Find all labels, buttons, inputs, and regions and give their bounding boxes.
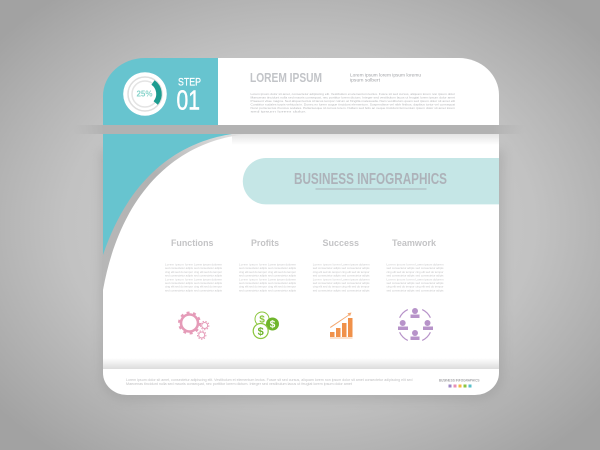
lorem text: sed consectetur adipis	[165, 266, 194, 270]
header paragraph: Curabitur sodales turpis vehicula in. Donec ex lorem augue tincidunt elementum. Suspendisse vel nibh finibus, dapibus tortor vel consequat	[250, 102, 455, 106]
lorem text: cing elit sed do tempor	[313, 270, 341, 274]
title pill	[243, 158, 499, 204]
lorem text: sed consectetur adipis	[268, 281, 297, 285]
lorem text: sed consectetur adipis	[194, 266, 223, 270]
lorem text	[313, 262, 370, 292]
lorem text: sed consectetur adipis	[239, 266, 268, 270]
icon: coins	[253, 312, 279, 338]
progress ring icon	[123, 72, 167, 116]
header subtitle: Lorem ipsum lorem ipsum loremu	[350, 72, 422, 78]
lorem text: sed consectetur adipis	[268, 288, 297, 292]
teal corner shape	[103, 134, 232, 255]
lorem text: cing elit sed do tempor	[416, 270, 444, 274]
lorem text: sed consectetur adipis	[416, 281, 444, 285]
step label: STEP	[178, 77, 201, 89]
lorem text: sed consectetur adipis	[313, 274, 341, 278]
lorem text: Lorem ipsum lorem	[313, 262, 341, 266]
lorem text: cing elit sed do tempor	[268, 270, 296, 274]
lorem text: cing elit sed do tempor	[386, 285, 415, 289]
header paragraph: Lorem ipsum dolor sit amet, consectetur adipiscing elit. Vestibulum et elementum lectus. Fusce sit sed cursus, aliquam lorem non ipsum dolor	[250, 92, 455, 96]
lorem text: cing elit sed do tempor	[194, 285, 222, 289]
lorem text	[386, 262, 444, 292]
heading: Functions	[171, 238, 214, 249]
lorem text: sed consectetur adipis	[342, 288, 370, 292]
lorem text: cing elit sed do tempor	[165, 270, 193, 274]
lorem text: cing elit sed do tempor	[239, 285, 267, 289]
lorem text: cing elit sed do tempor	[194, 270, 222, 274]
top fold shading	[232, 134, 499, 145]
icon: coins: $	[270, 320, 276, 330]
icon: gears	[179, 312, 209, 339]
lorem text: cing elit sed do tempor	[416, 285, 444, 289]
lorem text: sed consectetur adipis	[313, 288, 341, 292]
column: teamwork	[386, 238, 444, 340]
column: profits	[239, 238, 297, 338]
footer colour dots	[448, 384, 472, 388]
header teal panel	[103, 58, 218, 125]
column: success	[313, 238, 370, 338]
grey swoosh	[103, 134, 249, 290]
lorem text: sed consectetur adipis	[268, 274, 297, 278]
lorem text: sed consectetur adipis	[239, 288, 268, 292]
heading: Profits	[251, 238, 279, 249]
lorem text: sed consectetur adipis	[386, 274, 415, 278]
footer text: Lorem ipsum dolor sit amet, consectetur adipiscing elit. Vestibulum et elementum lectus. Fusce sit sed cursus, aliquam lorem non ipsum dolor sit amet consectetur adipiscing elit sed	[126, 378, 413, 382]
heading: Teamwork	[392, 238, 437, 249]
panel: main content	[103, 134, 499, 369]
header white panel	[218, 58, 499, 125]
footer white panel	[103, 369, 499, 395]
lorem text: Lorem ipsum dolorem	[342, 262, 370, 266]
lorem text	[165, 262, 223, 292]
lorem text: Lorem ipsum dolorem	[342, 277, 370, 281]
icon: team circle	[398, 308, 433, 340]
lorem text: sed consectetur adipis	[342, 274, 370, 278]
lorem text: cing elit sed do tempor	[313, 285, 341, 289]
progress ring icon: 25%	[136, 90, 153, 98]
step number: 01	[176, 84, 200, 115]
main white panel	[103, 134, 499, 369]
lorem text: cing elit sed do tempor	[268, 285, 296, 289]
lorem text: sed consectetur adipis	[239, 274, 268, 278]
heading: Success	[322, 238, 359, 249]
card shadow	[100, 150, 504, 401]
lorem text: sed consectetur adipis	[165, 281, 194, 285]
lorem text: Lorem ipsum dolorem	[416, 277, 444, 281]
header paragraph: Praesent vitae magna. Sed aliquet lectus id lacus tempor rutrum at fringilla malesuada. Nam vestibulum quam sed ipsum dolor sit amet elit	[250, 99, 455, 103]
fold band	[73, 125, 524, 134]
header title: LOREM IPSUM	[250, 70, 322, 85]
icon: rising bar chart	[330, 312, 352, 338]
lorem text: sed consectetur adipis	[386, 281, 415, 285]
lorem text: sed consectetur adipis	[416, 274, 444, 278]
lorem text: Lorem ipsum lorem	[239, 277, 268, 281]
pill underline	[316, 188, 426, 190]
footer text: Maecenas tincidunt nulla sed mauris consequat, nec porttitor lorem dictum. Integer sed vestibulum lacus ut feugiat lorem ipsum dolor amet	[126, 382, 352, 386]
lorem text: Lorem ipsum lorem	[165, 262, 194, 266]
lorem text: sed consectetur adipis	[194, 288, 223, 292]
lorem text: Lorem ipsum dolorem	[194, 262, 223, 266]
panel: footer	[103, 369, 499, 395]
header subtitle	[350, 72, 422, 82]
lorem text: sed consectetur adipis	[416, 266, 444, 270]
header paragraph: sed ipsum lorem dolor.	[250, 110, 307, 114]
lorem text: sed consectetur adipis	[342, 281, 370, 285]
bottom fold shading	[103, 358, 499, 369]
lorem text: Lorem ipsum dolorem	[268, 277, 297, 281]
lorem text: sed consectetur adipis	[313, 266, 341, 270]
lorem text: sed consectetur adipis	[313, 281, 341, 285]
lorem text: cing elit sed do tempor	[386, 270, 415, 274]
lorem text: Lorem ipsum dolorem	[416, 262, 444, 266]
lorem text: cing elit sed do tempor	[239, 270, 267, 274]
lorem text: sed consectetur adipis	[165, 274, 194, 278]
footer brand label: BUSINESS INFOGRAPHICS	[439, 378, 480, 382]
panel: top header	[103, 58, 499, 125]
lorem text: sed consectetur adipis	[268, 266, 297, 270]
lorem text: cing elit sed do tempor	[342, 285, 370, 289]
header subtitle: ipsum solbert	[350, 78, 381, 82]
footer text	[126, 378, 413, 386]
pill title: BUSINESS INFOGRAPHICS	[294, 171, 447, 188]
lorem text: Lorem ipsum lorem	[165, 277, 194, 281]
lorem text: Lorem ipsum lorem	[386, 262, 415, 266]
lorem text: Lorem ipsum lorem	[313, 277, 341, 281]
lorem text: sed consectetur adipis	[386, 266, 415, 270]
lorem text: sed consectetur adipis	[194, 274, 223, 278]
lorem text: cing elit sed do tempor	[342, 270, 370, 274]
header paragraph	[250, 92, 455, 114]
lorem text: sed consectetur adipis	[194, 281, 223, 285]
lorem text	[239, 262, 297, 292]
column: functions	[165, 238, 223, 339]
lorem text: Lorem ipsum dolorem	[194, 277, 223, 281]
lorem text: Lorem ipsum dolorem	[268, 262, 297, 266]
icon: coins: $	[258, 326, 264, 338]
lorem text: sed consectetur adipis	[416, 288, 444, 292]
icon: coins: $	[259, 314, 265, 326]
lorem text: Lorem ipsum lorem	[386, 277, 415, 281]
lorem text: cing elit sed do tempor	[165, 285, 193, 289]
lorem text: sed consectetur adipis	[342, 266, 370, 270]
lorem text: sed consectetur adipis	[386, 288, 415, 292]
lorem text: sed consectetur adipis	[165, 288, 194, 292]
lorem text: Lorem ipsum lorem	[239, 262, 268, 266]
header paragraph: Nunc porta lectus rhoncus sodales. Pellentesque id cursus lorem. Nullam sed felis ac neque tincidunt fermentum ipsum dolor sit amet lorem	[250, 106, 455, 110]
lorem text: sed consectetur adipis	[239, 281, 268, 285]
header paragraph: Maecenas tincidunt nulla sed mauris consequat, nec porttitor lorem dictum. Integer sed vestibulum lacus ut feugiat lorem ipsum dolor amet	[250, 96, 455, 100]
